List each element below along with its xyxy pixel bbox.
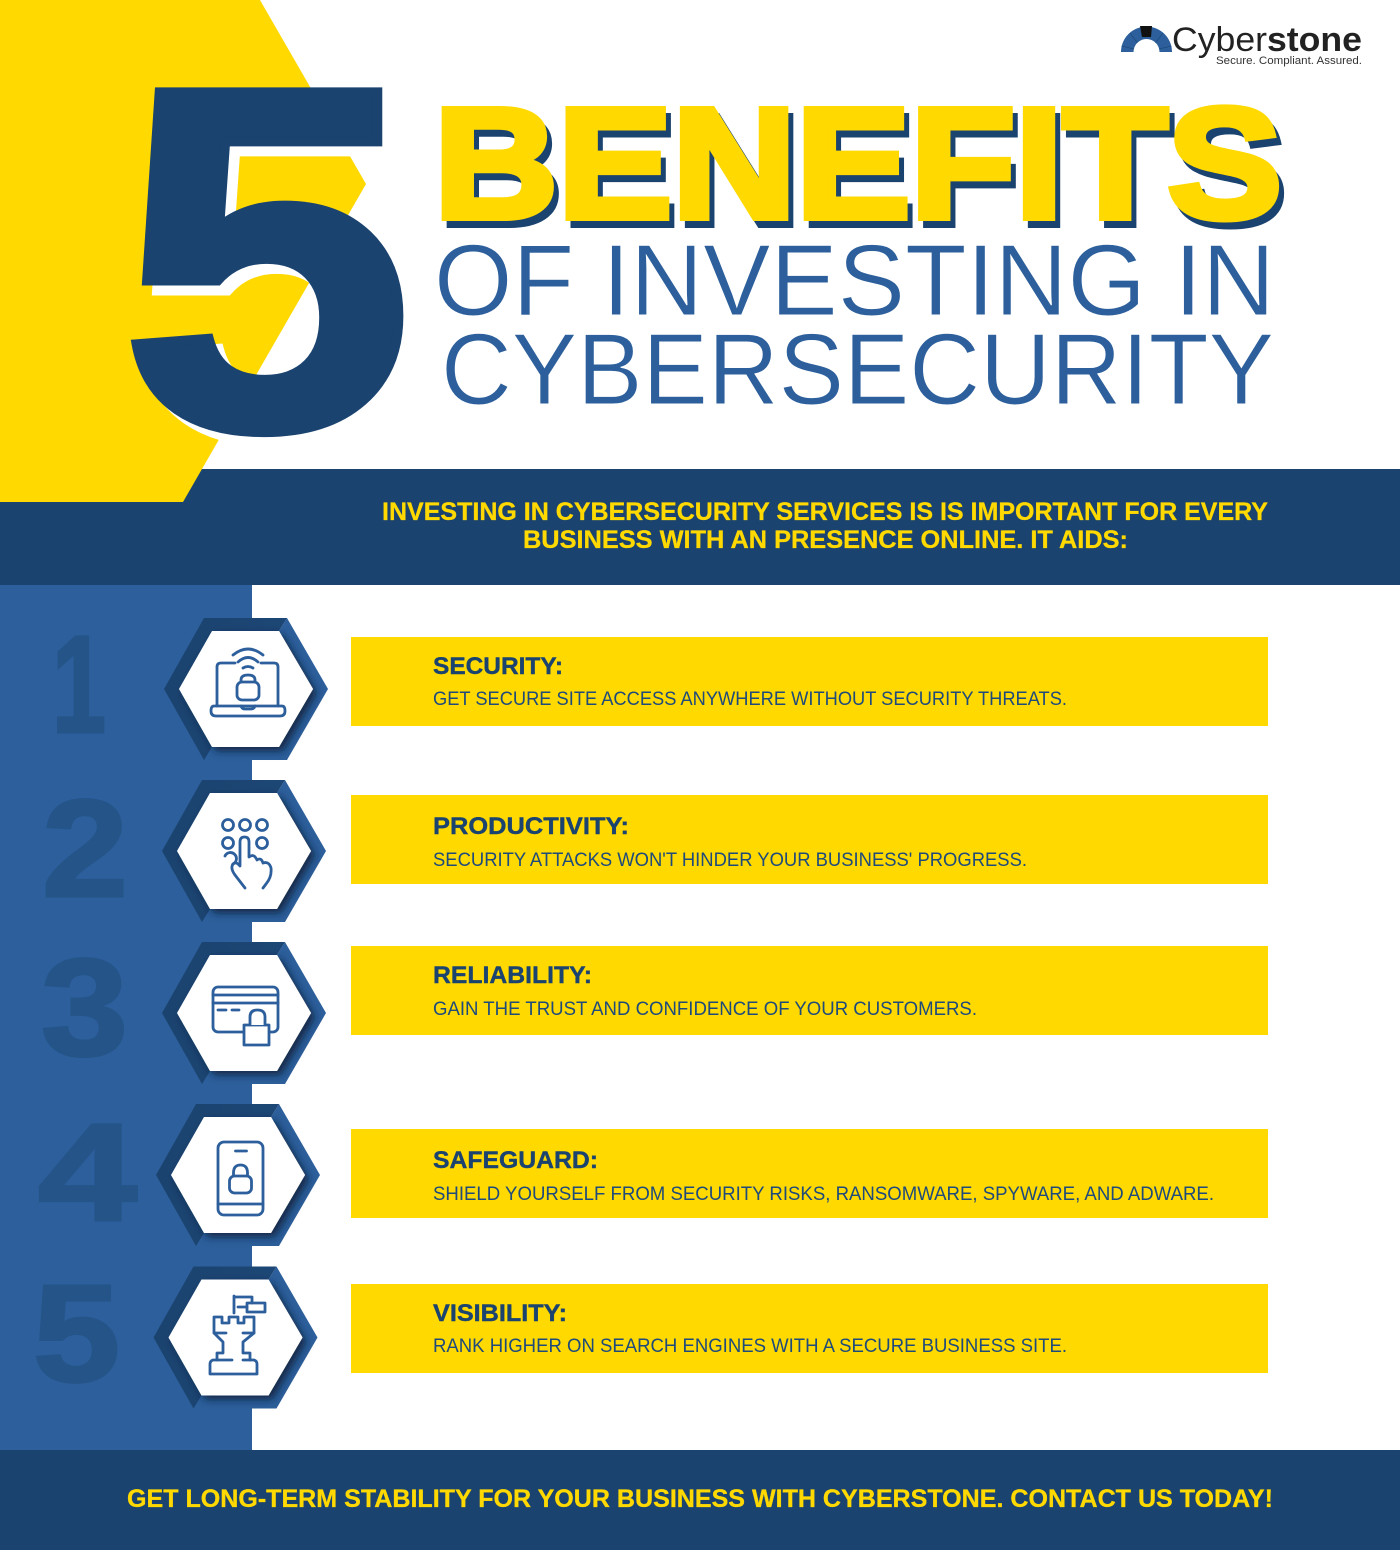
description: visibility: RANK HIGHER ON SEARCH ENGINES WITH A SECURE BUSINESS SITE. — [433, 1335, 1067, 1357]
intro text: INVESTING IN CYBERSECURITY SERVICES IS IS IMPORTANT FOR EVERY — [382, 498, 1268, 526]
hexagon 4 — [156, 1104, 320, 1246]
description: reliability: GAIN THE TRUST AND CONFIDENCE OF YOUR CUSTOMERS. — [433, 998, 977, 1020]
icon: phone with lock — [218, 1142, 263, 1215]
footer band — [0, 1450, 1400, 1550]
icon: credit card with lock — [213, 987, 278, 1045]
panel: visibility — [351, 1284, 1268, 1373]
number 2: 2 — [42, 772, 128, 926]
hexagon 2 — [162, 780, 326, 922]
yellow hexagon backdrop — [0, 0, 366, 502]
heading: security: SECURITY: — [433, 653, 563, 680]
description: safeguard: SHIELD YOURSELF FROM SECURITY RISKS, RANSOMWARE, SPYWARE, AND ADWARE. — [433, 1183, 1214, 1205]
icon: laptop with lock and wifi — [211, 649, 285, 716]
description: security: GET SECURE SITE ACCESS ANYWHERE WITHOUT SECURITY THREATS. — [433, 688, 1067, 710]
blue side panel — [0, 585, 252, 1450]
hexagon 3 — [162, 942, 326, 1084]
footer call to action: GET LONG-TERM STABILITY FOR YOUR BUSINESS WITH CYBERSTONE. CONTACT US TODAY! — [127, 1485, 1273, 1513]
intro text: BUSINESS WITH AN PRESENCE ONLINE. IT AIDS: — [523, 526, 1128, 554]
logo: Cyberstone — [1121, 21, 1362, 67]
intro band background — [0, 469, 1400, 585]
big numeral 5: 5 — [120, 0, 413, 532]
number 1: 1 — [52, 608, 106, 762]
number 4: 4 — [38, 1096, 137, 1250]
title: BENEFITS: BENEFITS — [434, 76, 1282, 252]
panel: reliability — [351, 946, 1268, 1035]
intro text — [382, 498, 1268, 554]
title: OF INVESTING IN: OF INVESTING IN — [434, 225, 1275, 337]
panel: security — [351, 637, 1268, 726]
panel: safeguard — [351, 1129, 1268, 1218]
panel: productivity — [351, 795, 1268, 884]
heading: safeguard: SAFEGUARD: — [433, 1147, 598, 1174]
logo tagline: Secure. Compliant. Assured. — [1216, 55, 1362, 67]
number 3: 3 — [41, 931, 128, 1085]
hexagon 1 — [164, 618, 328, 760]
logo wordmark: Cyberstone — [1172, 21, 1362, 59]
heading: reliability: RELIABILITY: — [433, 962, 592, 989]
icon: logo arch — [1121, 26, 1172, 52]
number 5: 5 — [33, 1257, 120, 1411]
title: CYBERSECURITY: CYBERSECURITY — [441, 314, 1274, 426]
icon: keypad with finger — [222, 820, 271, 888]
icon: castle tower with flag — [210, 1296, 265, 1374]
description: productivity: SECURITY ATTACKS WON'T HINDER YOUR BUSINESS' PROGRESS. — [433, 849, 1027, 871]
heading: visibility: VISIBILITY: — [433, 1300, 567, 1327]
hexagon 5 — [154, 1266, 318, 1408]
heading: productivity: PRODUCTIVITY: — [433, 813, 629, 840]
